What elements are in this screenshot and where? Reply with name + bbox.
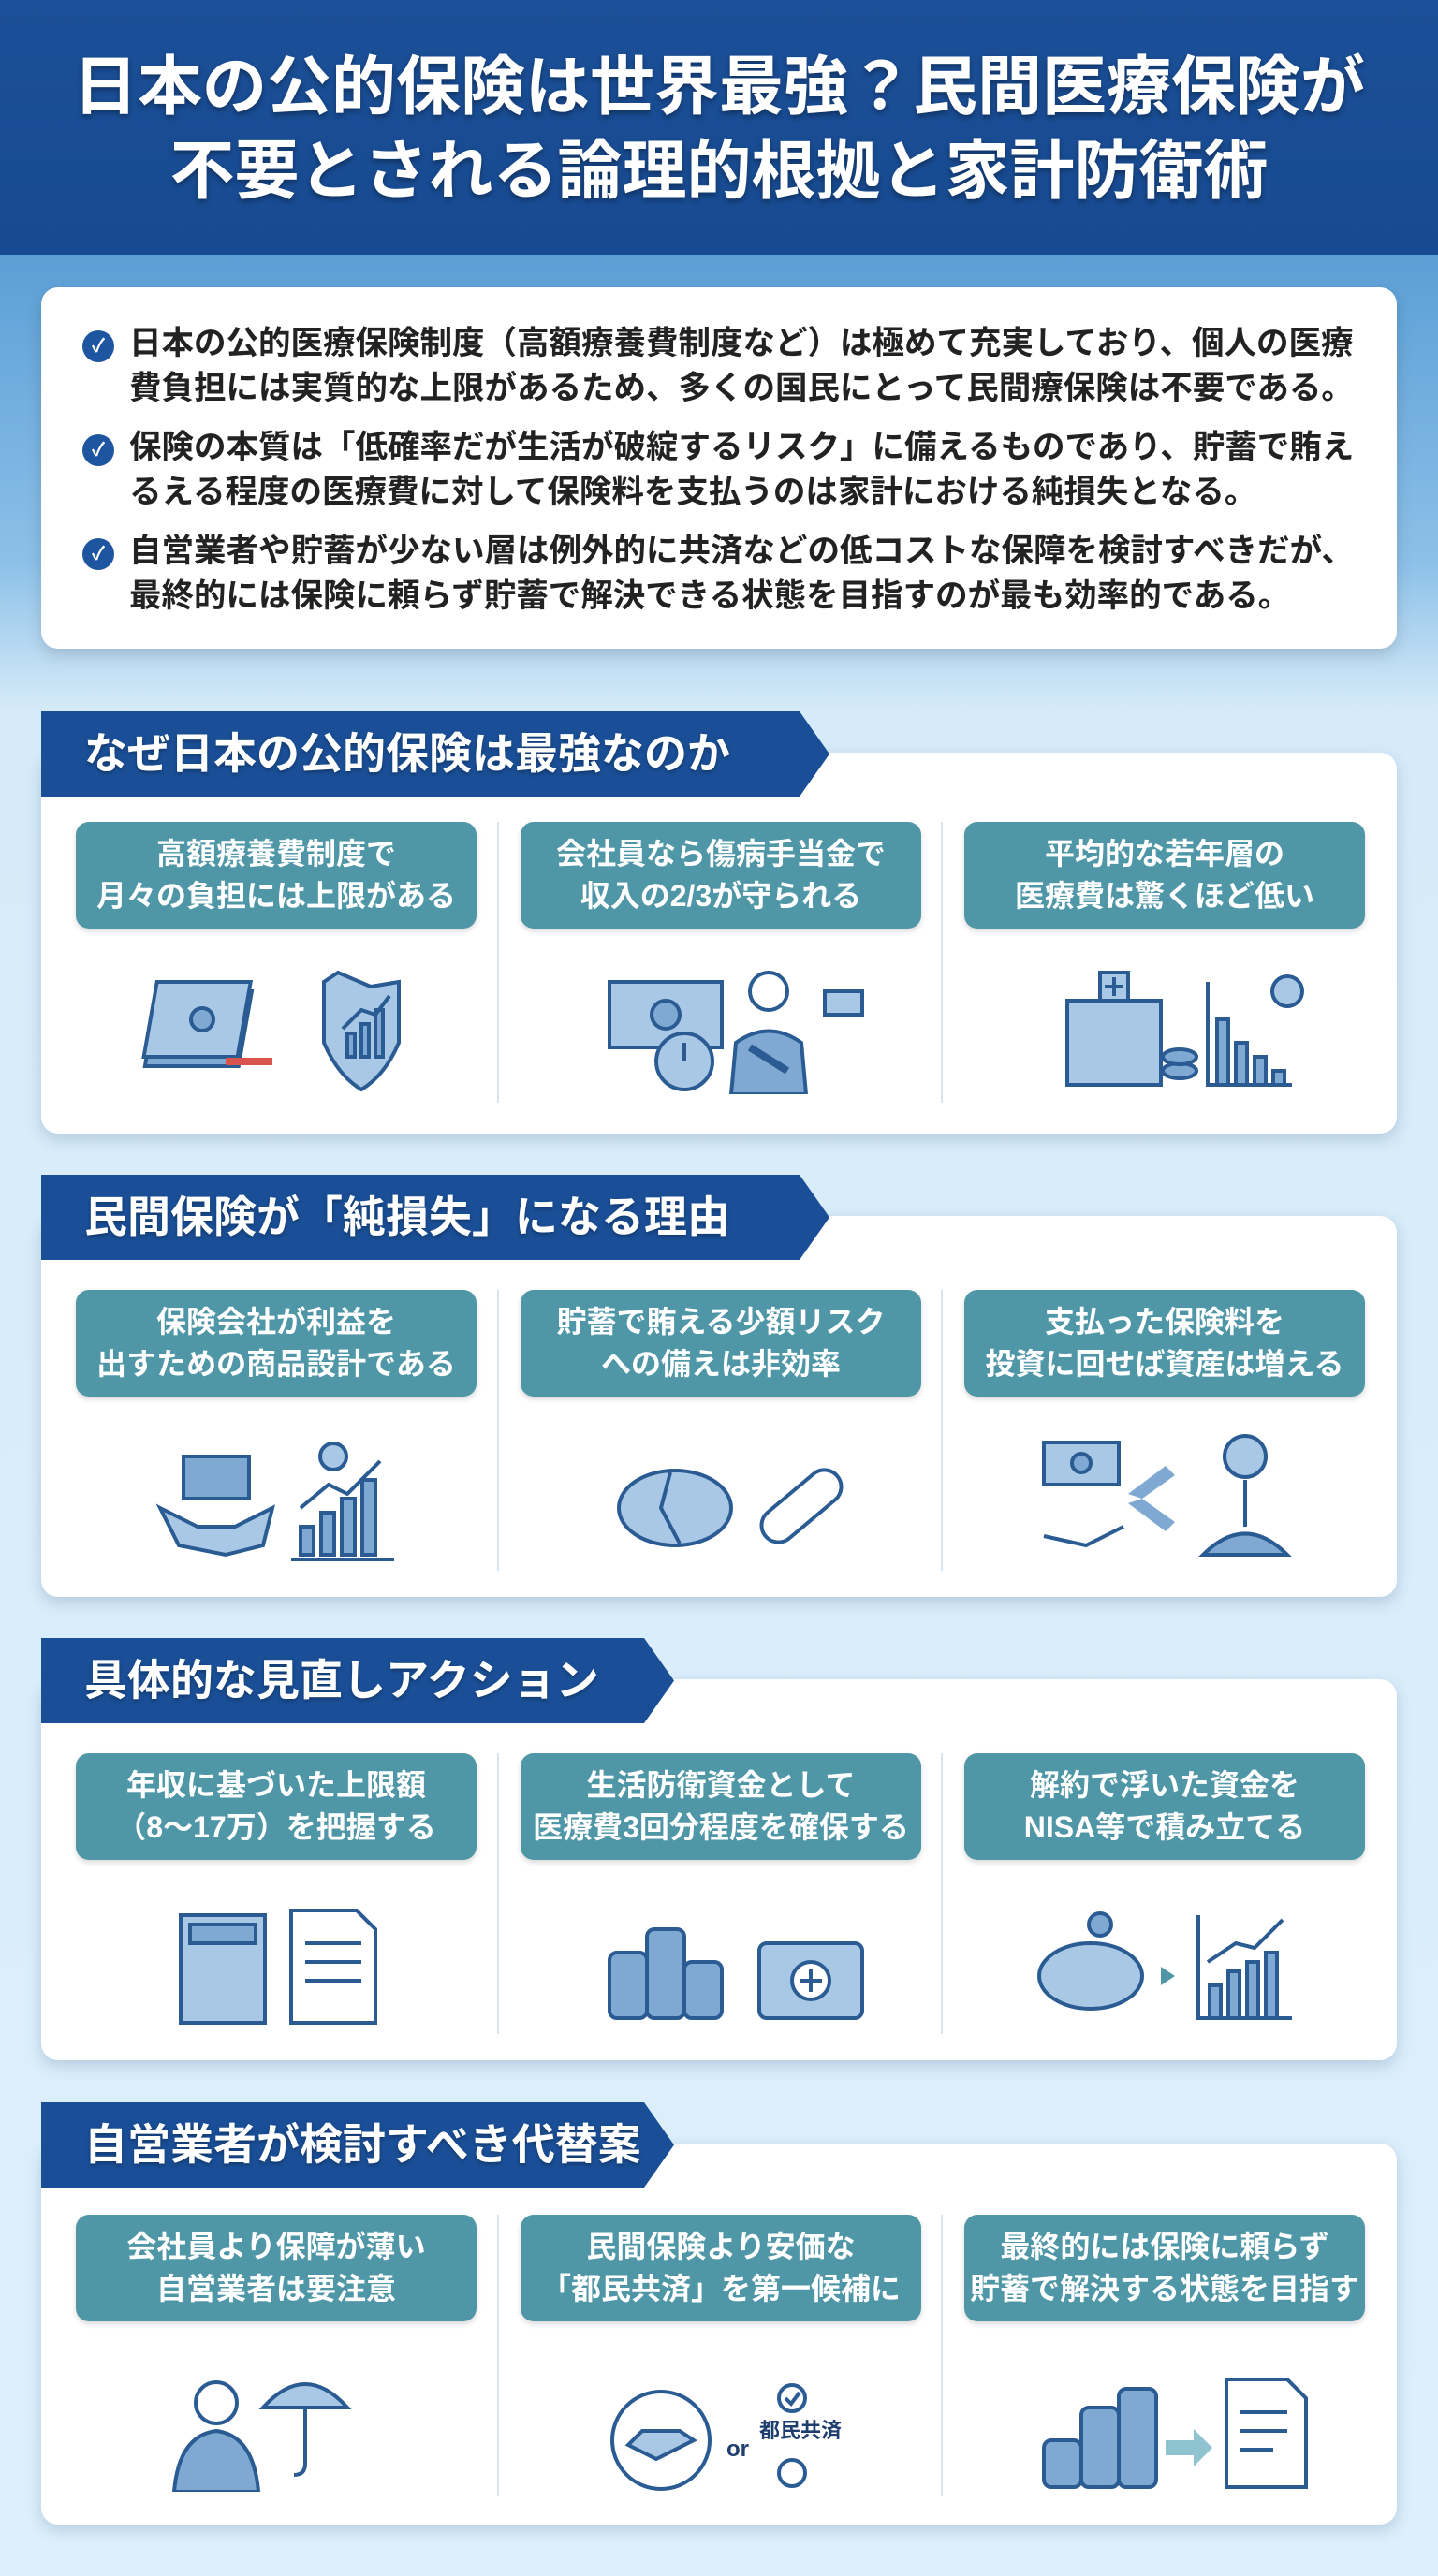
panel: section 1 [41,753,1397,1134]
card 2-1: 保険会社が利益を [156,1305,396,1339]
bullet 3: 自営業者や貯蓄が少ない層は例外的に共済などの低コストな保障を検討すべきだが、 [129,534,1354,569]
icon: handshake and growth chart [155,1442,394,1561]
title: 日本の公的保険は世界最強？民間医療保険が [73,51,1365,123]
card 1-3: 平均的な若年層の [1045,837,1284,871]
heading: section 4: 自営業者が検討すべき代替案 [84,2120,641,2169]
icon: handshake or tomin kyosai: or [726,2437,749,2462]
card 1-2: 会社員なら傷病手当金で [556,837,886,871]
panel: section 2 [41,1216,1397,1597]
arrows [1128,1466,1175,1531]
bullet 3 [82,534,1354,614]
bullet 3: 最終的には保険に頼らず貯蓄で解決できる状態を目指すのが最も効率的である。 [129,578,1290,614]
card 3-1 [76,1753,477,1860]
card 2-2: 貯蓄で賄える少額リスク [556,1305,886,1339]
bullet 2: 保険の本質は「低確率だが生活が破綻するリスク」に備えるものであり、貯蓄で賄え [129,430,1354,465]
card 4-3: 最終的には保険に頼らず [1000,2230,1329,2263]
heading: section 2: 民間保険が「純損失」になる理由 [84,1193,730,1241]
panel: summary [41,287,1397,649]
card 3-3 [964,1753,1365,1860]
icon: calculator and document [179,1909,377,2025]
heading: section 4 [41,2102,674,2188]
bullet 1 [82,326,1354,406]
card 3-2: 医療費3回分程度を確保する [533,1810,909,1844]
heading: section 3: 具体的な見直しアクション [84,1656,599,1705]
card 2-2: への備えは非効率 [601,1347,841,1381]
card 3-2 [521,1753,921,1860]
card 4-3 [964,2215,1365,2321]
icon: broken piggy bank and bandage [617,1468,843,1547]
bullet 1: 日本の公的医療保険制度（高額療養費制度など）は極めて充実しており、個人の医療 [129,326,1354,361]
icon: money to plant [1042,1434,1292,1557]
card 2-1: 出すための商品設計である [96,1347,456,1381]
card 1-1: 高額療養費制度で [156,837,396,871]
card 2-2 [521,1290,921,1397]
card 3-2: 生活防衛資金として [586,1768,856,1802]
icon: piggy bank arrow chart [1037,1911,1292,2020]
heading: section 1: なぜ日本の公的保険は最強なのか [84,729,730,778]
panel: section 3 [41,1679,1397,2060]
icon: person with umbrella [172,2380,352,2492]
icon: bill clock and injured person [608,971,864,1094]
card 4-2: 民間保険より安価な [586,2230,856,2263]
card 2-3: 支払った保険料を [1045,1305,1284,1339]
card 2-1 [76,1290,477,1397]
bullet 2: ✓ [92,440,105,461]
title: 不要とされる論理的根拠と家計防衛術 [170,135,1268,207]
card 1-3 [964,822,1365,929]
card 4-1: 自営業者は要注意 [156,2272,396,2305]
card 4-1: 会社員より保障が薄い [126,2230,426,2263]
card 2-3: 投資に回せば資産は増える [985,1347,1344,1381]
card 3-1: （8〜17万）を把握する [116,1810,436,1844]
title [0,0,1438,255]
heading: section 2 [41,1175,829,1260]
bullet 3: ✓ [92,544,105,564]
card 4-1 [76,2215,477,2321]
bullet 2 [82,429,1354,510]
card 1-1: 月々の負担には上限がある [96,879,456,913]
icon: money stack and shield [141,970,401,1091]
card 1-2: 収入の2/3が守られる [580,879,861,913]
icon: handshake or tomin kyosai: 都民共済 [759,2419,842,2442]
icon: hospital and falling bar chart [1065,971,1304,1087]
card 4-3: 貯蓄で解決する状態を目指す [970,2272,1359,2305]
panel: section 4 [41,2144,1397,2525]
icon: coins to document [1042,2378,1308,2489]
card 3-3: 解約で浮いた資金を [1030,1768,1299,1802]
card 2-3 [964,1290,1365,1397]
card 4-2 [521,2215,921,2321]
card 3-1: 年収に基づいた上限額 [126,1768,426,1802]
card 1-3: 医療費は驚くほど低い [1015,879,1314,913]
icon: coins and first-aid kit [608,1927,864,2020]
heading: section 3 [41,1638,674,1723]
card 3-3: NISA等で積み立てる [1024,1810,1305,1844]
icon: handshake or tomin kyosai [610,2383,842,2491]
bullet 1: 費負担には実質的な上限があるため、多くの国民にとって民間療保険は不要である。 [129,371,1354,406]
card 1-1 [76,822,477,929]
bullet 1: ✓ [92,336,105,357]
heading: section 1 [41,711,829,797]
card 4-2: 「都民共済」を第一候補に [541,2272,901,2305]
card 1-2 [521,822,921,929]
bullet 2: るえる程度の医療費に対して保険料を支払うのは家計における純損失となる。 [129,475,1256,510]
